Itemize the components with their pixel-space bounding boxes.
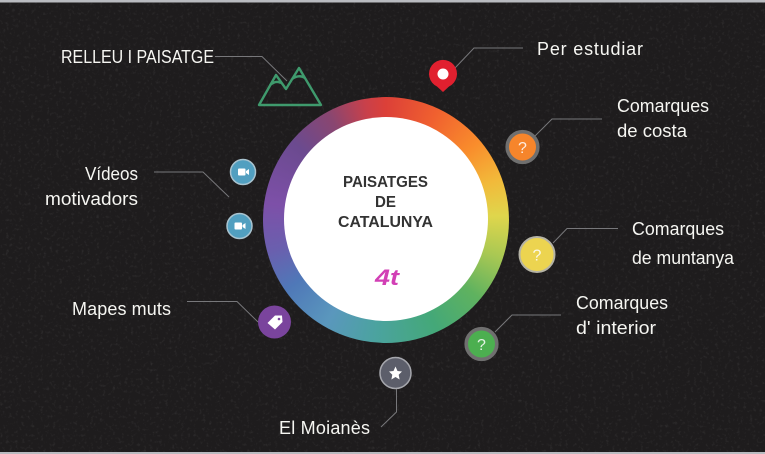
connector: costa: [534, 119, 602, 137]
colour ring with central disc: [262, 97, 508, 343]
icon: mountains: [259, 68, 321, 105]
connector: interior: [495, 315, 561, 332]
icon: purple tag: [258, 306, 291, 338]
icon: orange question: ?: [518, 140, 527, 157]
label: Mapes muts: Mapes muts: [72, 299, 171, 319]
label: Vídeos motivadors: Vídeos: [85, 164, 138, 184]
connector: Relleu i paisatge: [215, 56, 287, 81]
label: Comarques de muntanya: Comarques: [632, 219, 724, 239]
icon: yellow question: ?: [533, 248, 542, 264]
label: Comarques de costa: Comarques: [617, 96, 709, 116]
label: Comarques de costa: de costa: [617, 121, 688, 141]
label: Comarques de muntanya: [632, 219, 735, 268]
connector: El Moianès: [381, 389, 396, 427]
connector: Vídeos: [154, 172, 229, 197]
central title: PAISATGES: [343, 174, 428, 191]
label: Comarques d'interior: Comarques: [576, 293, 668, 313]
course label 4t: 4t: [374, 265, 401, 290]
icon: orange question: [507, 132, 538, 162]
icon: yellow question: [520, 237, 554, 272]
label: Vídeos motivadors: motivadors: [45, 189, 138, 209]
icon: map pin: [429, 60, 457, 92]
central title: [338, 174, 433, 231]
label: Vídeos motivadors: [45, 164, 138, 209]
central title: DE: [375, 194, 396, 211]
connector: Mapes muts: [187, 302, 258, 322]
label: Comarques de costa: [617, 96, 709, 141]
connector: muntanya: [553, 228, 618, 243]
label: El Moianès: El Moianès: [279, 418, 370, 438]
label: Comarques d'interior: d' interior: [576, 318, 656, 338]
central title: CATALUNYA: [338, 214, 433, 231]
icon: video 1: [230, 160, 256, 184]
icon: green question: ?: [477, 337, 486, 354]
connector: Per estudiar: [455, 48, 523, 68]
label: Comarques de muntanya: de muntanya: [632, 248, 735, 268]
icon: video 2: [227, 214, 252, 238]
icon: green question: [466, 329, 497, 359]
label: Relleu i paisatge: RELLEU I PAISATGE: [61, 47, 214, 67]
label: Comarques d'interior: [576, 293, 668, 338]
label: Per estudiar: Per estudiar: [537, 39, 643, 59]
icon: star badge: [380, 358, 411, 388]
